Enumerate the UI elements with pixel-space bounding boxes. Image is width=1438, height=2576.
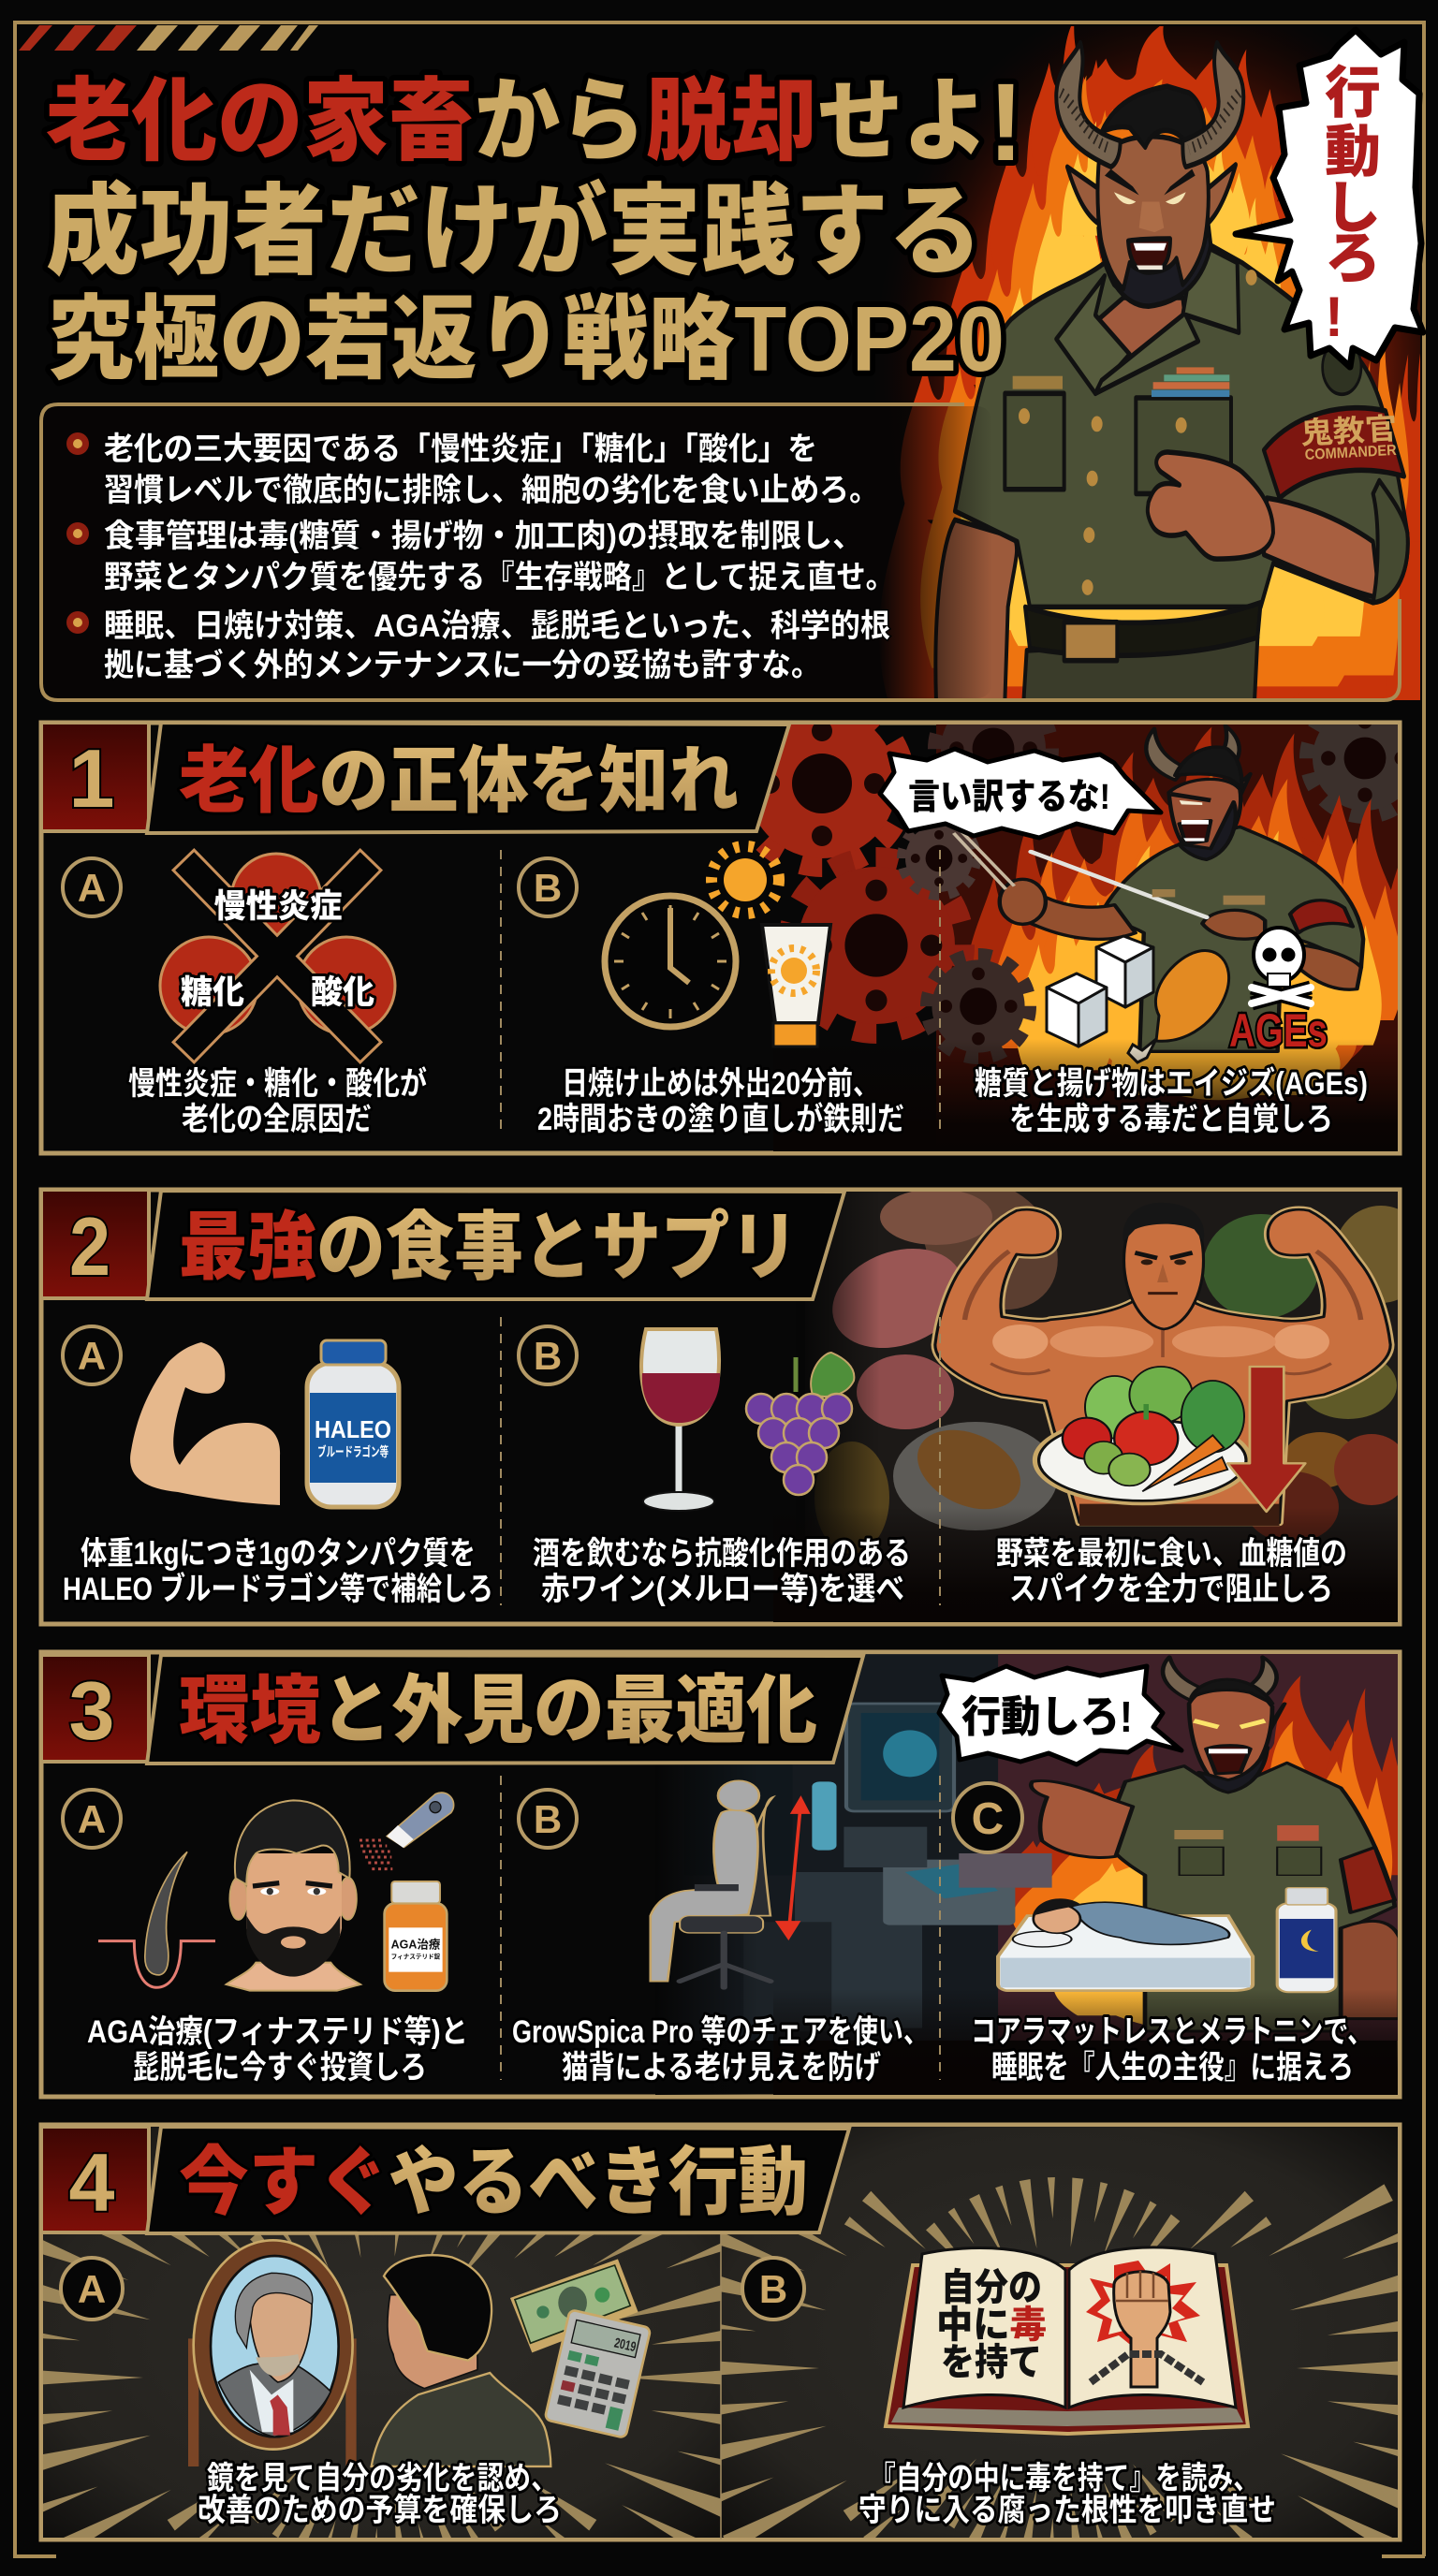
salad plate — [1035, 1367, 1250, 1503]
speed lines right — [721, 2127, 1398, 2538]
badge C — [953, 1783, 1022, 1852]
fried chicken — [1128, 951, 1229, 1062]
icon: HALEO bottle: HALEO — [315, 1415, 391, 1443]
icon: hair follicle — [98, 1852, 215, 1987]
captions panel 2: HALEO ブルードラゴン等で補給しろ — [63, 1571, 493, 1607]
captions panel 3: 睡眠を『人生の主役』に据えろ — [991, 2050, 1354, 2086]
speech bubble: 行動しろ: 行動しろ! — [1325, 62, 1381, 348]
commander figure — [935, 43, 1408, 702]
uniform details — [1013, 270, 1361, 595]
icon: sunscreen tube — [762, 925, 830, 1046]
gears and fire background — [740, 691, 1423, 1153]
speech bubble: 行動しろ — [939, 1666, 1181, 1764]
section heading: 最強の食事とサプリ — [179, 1206, 799, 1289]
book cover words: を持て — [941, 2342, 1042, 2383]
captions panel 1: 2時間おきの塗り直しが鉄則だ — [537, 1101, 904, 1137]
icon: three causes crossed out: 慢性炎症 — [213, 888, 343, 925]
section number 2 — [41, 1190, 149, 1298]
summary text: 習慣レベルで徹底的に排除し、細胞の劣化を食い止めろ。 — [104, 473, 879, 508]
sugar cubes — [1047, 936, 1153, 1046]
badge B: B — [534, 1334, 562, 1378]
badge A — [61, 2258, 123, 2320]
badge B: B — [534, 866, 562, 910]
icon: sun — [712, 846, 779, 914]
skull and crossbones — [1252, 928, 1311, 1003]
badge A: A — [78, 1797, 106, 1841]
captions panel 4: 改善のための予算を確保しろ — [198, 2493, 562, 2528]
icon: calculator — [545, 2309, 651, 2438]
icon: melatonin bottle — [1277, 1888, 1336, 1992]
arrow: blood sugar down — [1227, 1367, 1305, 1512]
badge A: A — [78, 866, 106, 910]
title — [46, 61, 1023, 390]
summary text — [104, 432, 895, 683]
title: 老化の家畜から脱却せよ — [46, 70, 999, 172]
panel 4: 今すぐやるべき行動 — [7, 2125, 1432, 2569]
icon: mirror with old face — [194, 2240, 353, 2466]
badge A: A — [78, 2267, 106, 2311]
icon: ergonomic chair and seated figure — [651, 1780, 808, 1987]
icon: man seen from behind — [372, 2255, 550, 2466]
captions panel 1: 慢性炎症・糖化・酸化が — [128, 1065, 427, 1102]
icon: three causes crossed out — [160, 854, 395, 1042]
speed lines left — [43, 2127, 721, 2538]
captions panel 1: 老化の全原因だ — [182, 1102, 372, 1137]
captions panel 2: 赤ワイン(メルロー等)を選べ — [541, 1572, 904, 1607]
book cover words: 中に毒 — [936, 2305, 1047, 2346]
captions panel 2: スパイクを全力で阻止しろ — [1009, 1572, 1333, 1607]
bullet markers — [66, 432, 89, 634]
title: 成功者だけが実践する — [46, 177, 982, 287]
captions panel 1: を生成する毒だと自覚しろ — [1009, 1102, 1333, 1137]
icon: flexed arm — [130, 1342, 280, 1505]
icon: AGA medicine bottle: フィナステリド錠 — [391, 1954, 441, 1961]
icon: three causes crossed out: 糖化 — [181, 974, 244, 1011]
speech bubble: 行動しろ — [1236, 30, 1423, 367]
armband text: 鬼教官 — [1299, 412, 1398, 450]
captions panel 2: 野菜を最初に食い、血糖値の — [996, 1536, 1347, 1572]
captions panel 4 — [198, 2461, 1276, 2528]
captions panel 2: 体重1kgにつき1gのタンパク質を — [81, 1536, 476, 1572]
section number 1: 1 — [69, 732, 114, 825]
section number 4: 4 — [69, 2136, 115, 2229]
panel 2: 最強の食事とサプリ — [41, 1153, 1428, 1624]
flames behind commander — [879, 19, 1438, 746]
badge B — [742, 2258, 804, 2320]
speech bubble: 言い訳するな: 言い訳するな! — [908, 778, 1110, 817]
speech bubble: 言い訳するな — [880, 749, 1161, 838]
summary text: 野菜とタンパク質を優先する『生存戦略』として捉え直せ。 — [104, 560, 895, 595]
pointing demon — [1031, 1657, 1400, 2031]
badge B — [519, 1326, 577, 1384]
icon: man's face — [227, 1800, 360, 1991]
badge A — [63, 1326, 121, 1384]
icon: calculator: 2019 — [612, 2335, 638, 2355]
section heading — [147, 723, 789, 833]
summary text: 睡眠、日焼け対策、AGA治療、髭脱毛といった、科学的根 — [104, 608, 890, 644]
badge A — [63, 1790, 121, 1848]
summary text: 拠に基づく外的メンテナンスに一分の妥協も許すな。 — [104, 648, 821, 683]
section heading: 今すぐやるべき行動 — [179, 2141, 808, 2224]
demon with pointer — [954, 725, 1363, 1051]
muscular man with vegetables — [935, 1203, 1390, 1526]
book cover words — [936, 2267, 1047, 2383]
captions panel 2 — [63, 1536, 1347, 1607]
icon: money — [510, 2259, 638, 2352]
badge A — [63, 858, 121, 916]
icon: three causes crossed out: 酸化 — [311, 974, 374, 1011]
badge A: A — [78, 1334, 106, 1378]
book cover words: 自分の — [941, 2267, 1042, 2308]
hazard stripes — [19, 25, 318, 51]
captions panel 3: GrowSpica Pro 等のチェアを使い、 — [512, 2014, 929, 2050]
summary text: 老化の三大要因である「慢性炎症」「糖化」「酸化」を — [104, 432, 817, 467]
icon: HALEO bottle: ブルードラゴン等 — [317, 1444, 389, 1459]
captions panel 4: 鏡を見て自分の劣化を認め、 — [207, 2461, 558, 2496]
icon: HALEO bottle — [307, 1340, 399, 1507]
captions panel 3: 猫背による老け見えを防げ — [562, 2050, 881, 2086]
captions panel 4: 守りに入る腐った根性を叩き直せ — [858, 2493, 1276, 2528]
icon: sleeper on mattress — [998, 1898, 1253, 1991]
speech bubble: 行動しろ: 行動しろ! — [961, 1692, 1133, 1741]
captions panel 1: 糖質と揚げ物はエイジズ(AGEs) — [975, 1065, 1368, 1102]
summary box — [41, 404, 1400, 700]
section heading: 環境と外見の最適化 — [179, 1669, 817, 1752]
badge B — [519, 858, 577, 916]
hero: flaming demon commander: COMMANDER — [1304, 443, 1397, 463]
icon: AGA medicine bottle — [385, 1881, 447, 1991]
captions panel 3 — [87, 2014, 1372, 2086]
badge B: B — [759, 2267, 787, 2311]
captions panel 2: 酒を飲むなら抗酸化作用のある — [533, 1536, 911, 1572]
icon: clock — [605, 896, 736, 1027]
summary text: 食事管理は毒(糖質・揚げ物・加工肉)の摂取を制限し、 — [104, 519, 863, 554]
panel 1: 老化の正体を知れ — [41, 691, 1423, 1153]
section number 4 — [41, 2127, 149, 2232]
AGEs label: AGEs — [1229, 1004, 1328, 1057]
captions panel 1 — [128, 1065, 1368, 1137]
captions panel 4: 『自分の中に毒を持て』を読み、 — [870, 2461, 1259, 2496]
panel 3: 環境と外見の最適化 — [41, 1652, 1409, 2097]
face details — [1061, 93, 1239, 270]
section number 1 — [41, 723, 149, 831]
console and fire background — [655, 1654, 1409, 2097]
section number 3: 3 — [69, 1664, 114, 1757]
badge B: B — [534, 1797, 562, 1841]
section number 2: 2 — [69, 1200, 110, 1293]
section number 3 — [41, 1655, 149, 1762]
captions panel 1: 日焼け止めは外出20分前、 — [562, 1066, 879, 1102]
section heading: 老化の正体を知れ — [179, 739, 739, 822]
hero: flaming demon commander — [884, 26, 1420, 700]
captions panel 3: AGA治療(フィナステリド等)と — [87, 2014, 468, 2050]
captions panel 3: 髭脱毛に今すぐ投資しろ — [133, 2050, 427, 2086]
icon: wine glass — [641, 1329, 720, 1511]
title: ! — [989, 61, 1023, 184]
icon: spray — [360, 1793, 454, 1869]
icon: AGA medicine bottle: AGA治療 — [391, 1938, 441, 1952]
food background — [773, 1192, 1398, 1622]
icon: grapes — [746, 1353, 854, 1495]
muscular man — [935, 1203, 1390, 1526]
title: 究極の若返り戦略TOP20 — [48, 287, 1005, 390]
badge C: C — [972, 1794, 1004, 1844]
icon: open book — [886, 2247, 1248, 2434]
burst and raised fist in chains — [1086, 2261, 1203, 2387]
badge B — [519, 1790, 577, 1848]
